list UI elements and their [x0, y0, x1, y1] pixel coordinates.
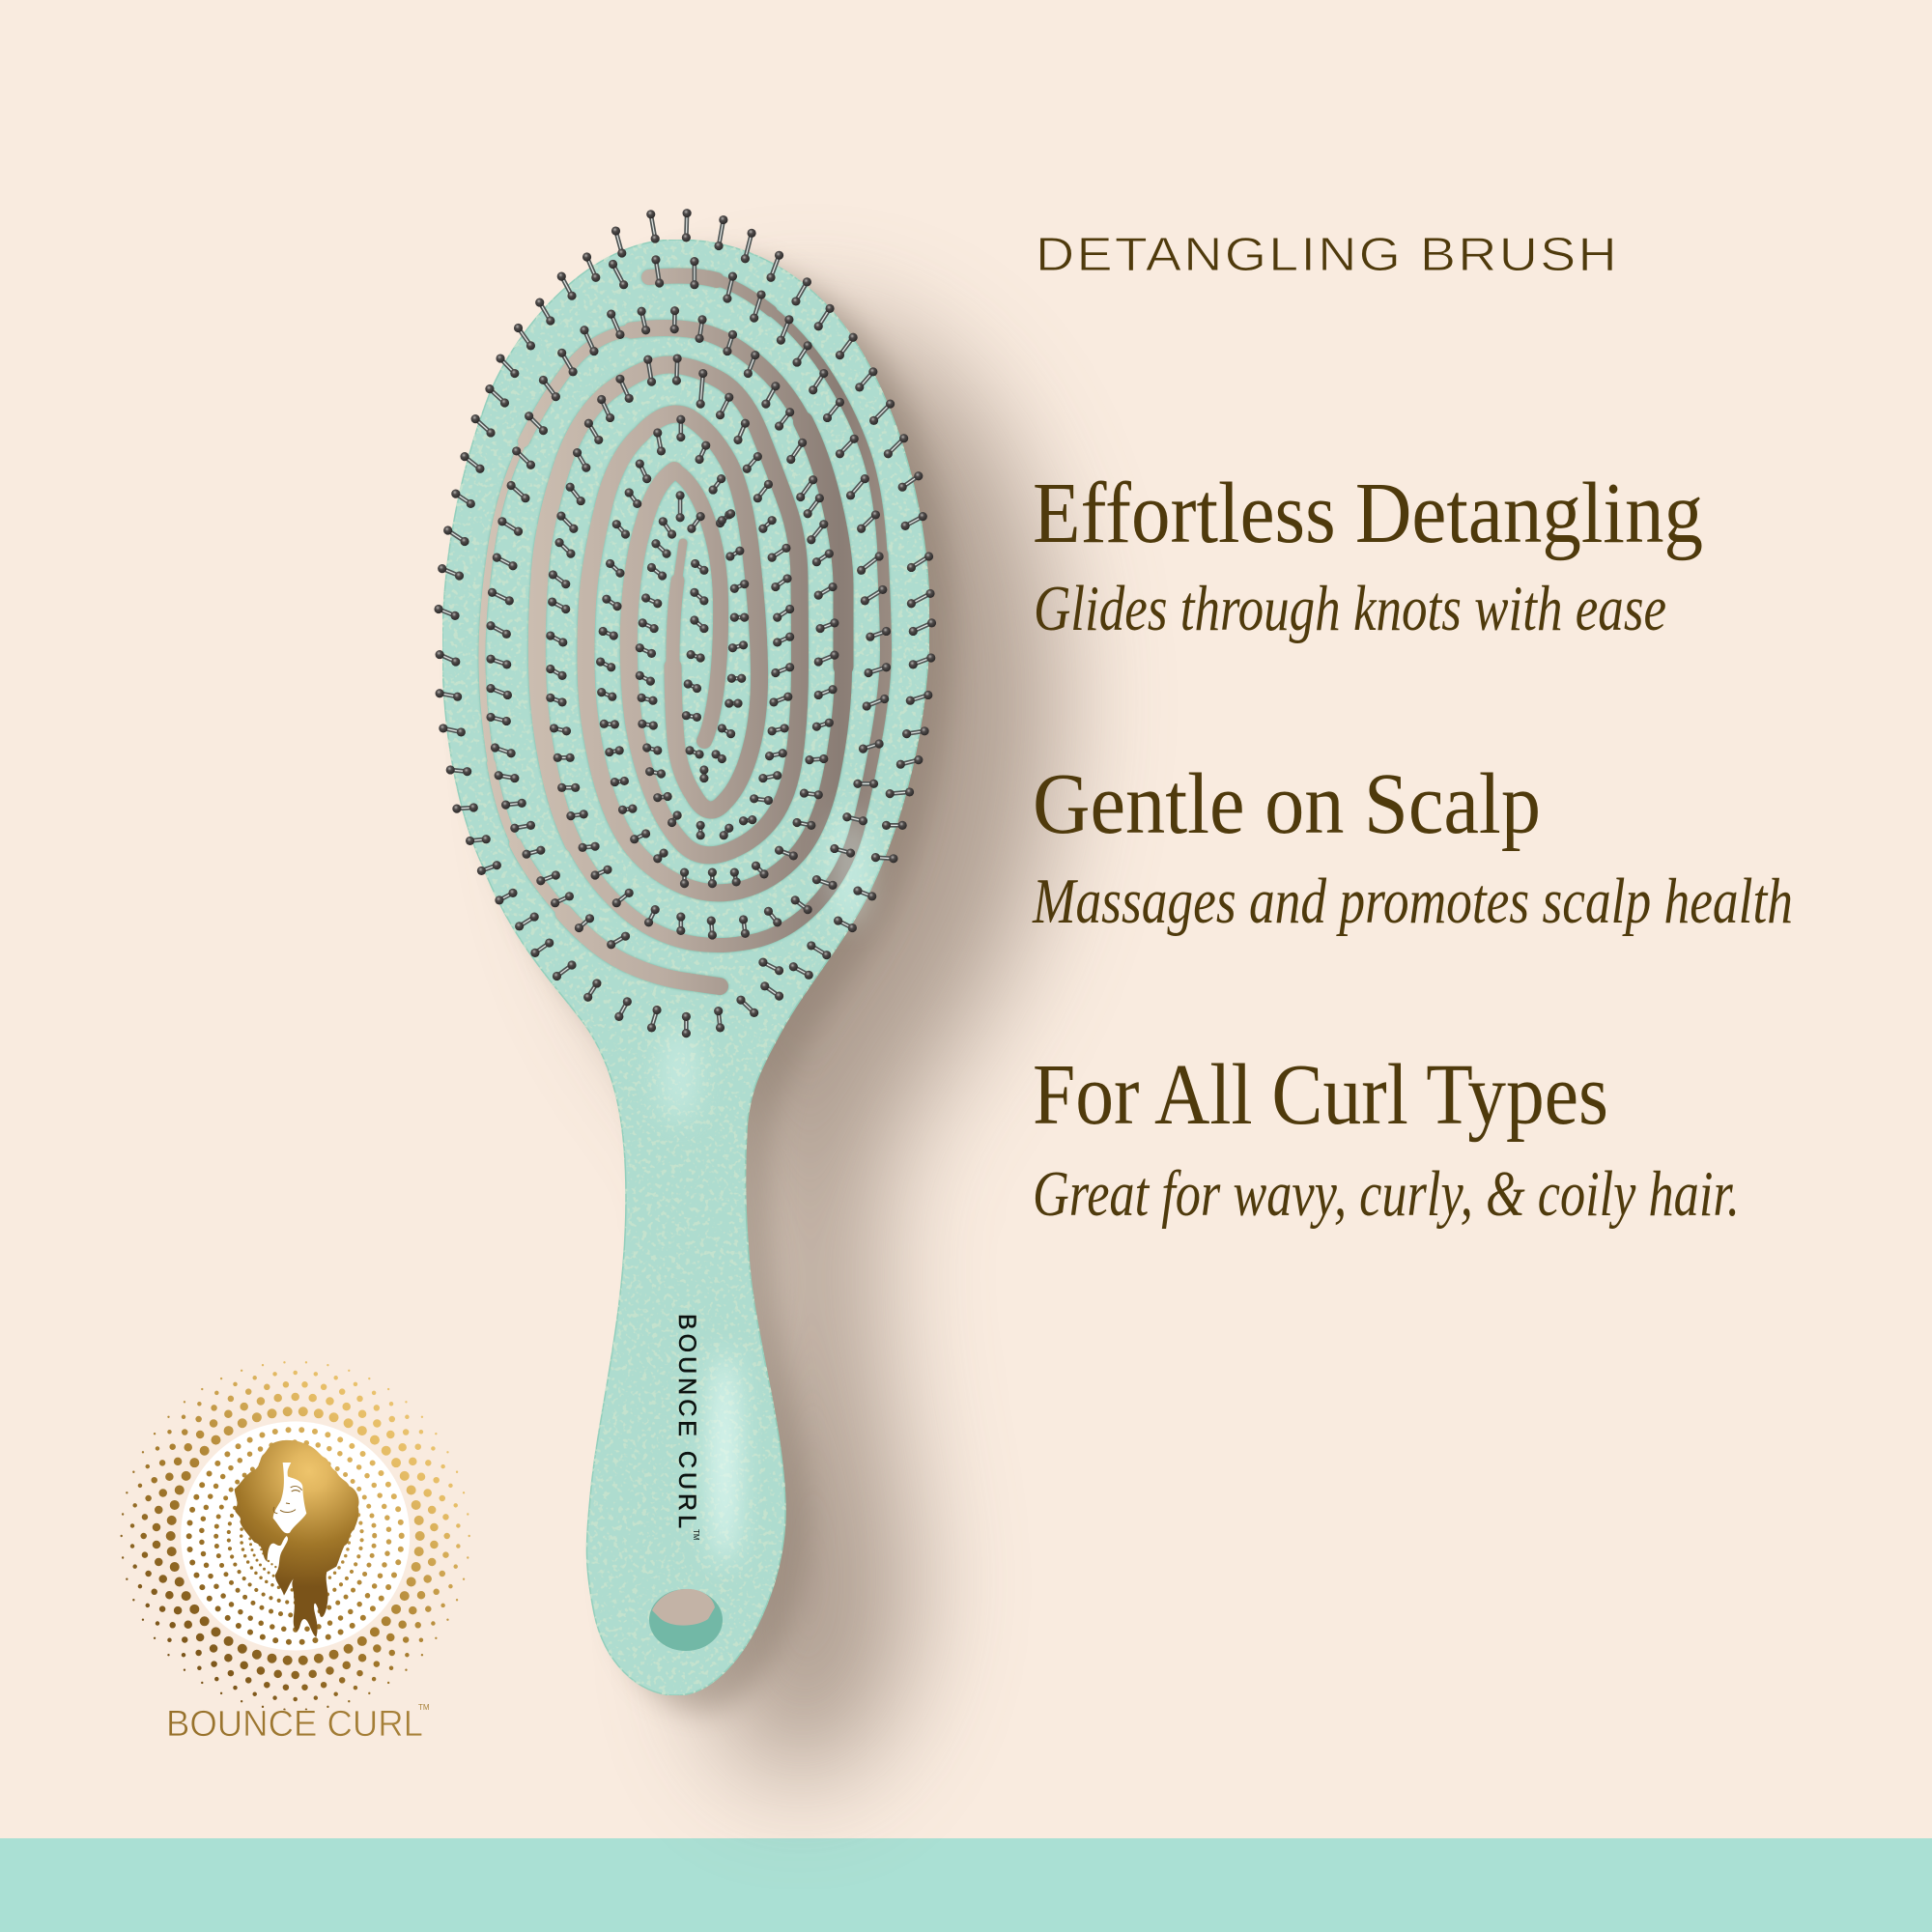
feature 2 [1032, 756, 1793, 937]
eyebrow heading: DETANGLING BRUSH [1036, 229, 1619, 281]
brush body [442, 240, 929, 1695]
brush handle brand text: BOUNCE CURL [673, 1314, 700, 1528]
brush cast shadow [468, 255, 1055, 1777]
logo dot rings inside circle [189, 1430, 402, 1642]
feature 1 [1033, 466, 1703, 644]
feature 3 [1033, 1047, 1740, 1230]
feature 3 title: For All Curl Types [1033, 1047, 1608, 1143]
feature 1 description: Glides through knots with ease [1034, 573, 1666, 644]
brush handle brand text: TM [692, 1529, 700, 1541]
handle and neck highlights [660, 811, 871, 1565]
bottom teal band [0, 1838, 1932, 1932]
hanging hole [649, 1589, 723, 1651]
feature 2 title: Gentle on Scalp [1033, 756, 1541, 852]
logo trademark: TM [418, 1703, 430, 1712]
spiral vent slots [482, 276, 886, 986]
logo curly hair silhouette with face [235, 1440, 359, 1637]
logo white circle [181, 1422, 410, 1650]
feature 1 title: Effortless Detangling [1033, 466, 1703, 561]
logo dot burst outside circle [122, 1362, 469, 1710]
logo wordmark: BOUNCE CURL [166, 1704, 423, 1745]
bristles [439, 213, 931, 1034]
hairbrush [439, 213, 931, 1695]
logo: Bounce Curl [122, 1362, 469, 1745]
feature 3 description: Great for wavy, curly, & coily hair. [1033, 1158, 1740, 1230]
